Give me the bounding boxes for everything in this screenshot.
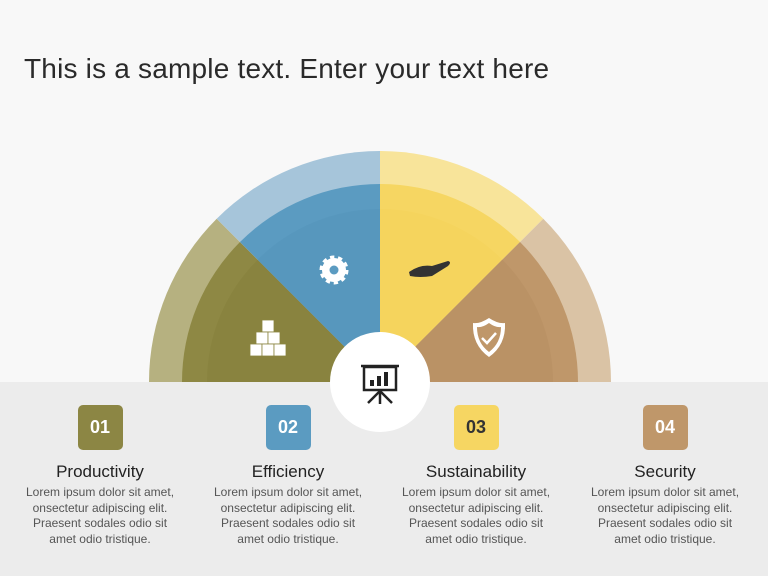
item 02: Praesent sodales odio sit [221,516,355,530]
item 04: Praesent sodales odio sit [598,516,732,530]
item 03: Lorem ipsum dolor sit amet, [402,485,550,499]
item 03: amet odio tristique. [425,532,527,546]
icon: gear [322,258,346,282]
item 03 [402,405,550,546]
item 03: Sustainability [426,462,526,481]
center circle with presentation icon [330,332,430,432]
item 02: onsectetur adipiscing elit. [221,500,355,514]
item 03: 03 [466,417,486,437]
item 02: Lorem ipsum dolor sit amet, [214,485,362,499]
icon: shield [473,318,505,357]
icon: boxes [250,320,286,356]
item 03: onsectetur adipiscing elit. [409,500,543,514]
item 02: amet odio tristique. [237,532,339,546]
sector: productivity [149,219,380,382]
item 04 [591,405,739,546]
icon: hand [409,261,450,277]
item 04: Security [634,462,696,481]
bottom band [0,382,768,576]
item 01: Lorem ipsum dolor sit amet, [26,485,174,499]
item 01: 01 [90,417,110,437]
item 04: Lorem ipsum dolor sit amet, [591,485,739,499]
item 04: 04 [655,417,675,437]
item 02: 02 [278,417,298,437]
sector: efficiency [217,151,380,382]
item 01: amet odio tristique. [49,532,151,546]
item 01 [26,405,174,546]
item 02 [214,405,362,546]
sector: security [380,219,611,382]
item 03: Praesent sodales odio sit [409,516,543,530]
item 02: Efficiency [252,462,324,481]
item 04: onsectetur adipiscing elit. [598,500,732,514]
sector: sustainability [380,151,543,382]
title: This is a sample text. Enter your text here [24,53,549,84]
item 04: amet odio tristique. [614,532,716,546]
item 01: Productivity [56,462,144,481]
item 01: onsectetur adipiscing elit. [33,500,167,514]
item 01: Praesent sodales odio sit [33,516,167,530]
